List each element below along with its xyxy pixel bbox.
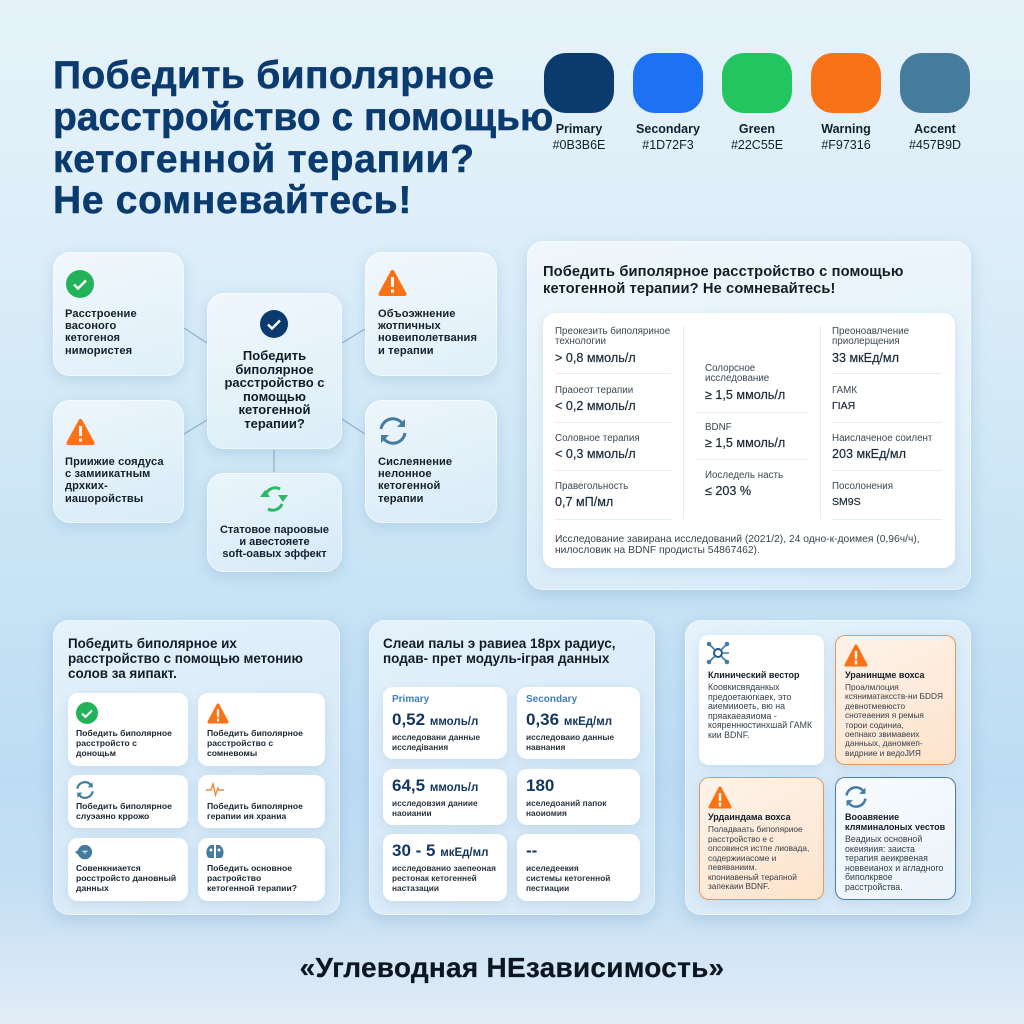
body — [708, 683, 812, 741]
stat: ≥ 1,5 ммоль/л — [705, 436, 785, 450]
body: океияиия: заиста — [845, 844, 915, 854]
stat — [705, 470, 783, 498]
value: 64,5 ммоль/л — [392, 776, 478, 795]
description: исследовани данные — [392, 732, 480, 742]
icon: sync — [845, 786, 867, 808]
title: Победить биполярное — [53, 54, 494, 97]
stat — [555, 481, 628, 509]
stat — [555, 385, 636, 413]
body: расстройства. — [845, 882, 903, 892]
body: певяваниим. — [708, 862, 757, 872]
heading: терапии? — [244, 416, 305, 431]
hub card: centre — [207, 293, 342, 449]
description: исследоваио данные — [526, 732, 614, 742]
palette legend — [544, 53, 970, 152]
heading: помощью — [243, 389, 306, 404]
icon: navy check — [260, 310, 288, 338]
icon: warning — [844, 643, 868, 667]
heading — [383, 636, 615, 666]
swatch label: green: Green — [739, 122, 775, 136]
panel: data modules — [369, 620, 655, 915]
stat: Правегольность — [555, 481, 628, 492]
hub card: bottom right — [365, 400, 497, 523]
swatch label: accent — [909, 122, 961, 152]
data card — [383, 687, 507, 759]
heading — [224, 348, 325, 431]
body: торои содиниа, — [845, 720, 904, 730]
body: видрние и ведоЈИЯ — [845, 748, 921, 758]
text: нелонное — [378, 468, 432, 480]
text: и авестояете — [239, 536, 310, 548]
label: Secondary — [526, 694, 577, 705]
body — [845, 835, 943, 893]
title — [53, 54, 553, 222]
stat: 0,7 мП/мл — [555, 495, 613, 509]
text — [378, 456, 452, 505]
text: дрхких- — [65, 480, 108, 492]
text — [207, 728, 303, 758]
heading: Слеаи палы э равиеа 18рх радиус, — [383, 636, 615, 650]
text: жотпичных — [378, 320, 441, 332]
swatch label: warning: #F97316 — [821, 138, 871, 152]
value: 180 — [526, 776, 554, 795]
text — [76, 864, 176, 893]
icon: green check — [76, 702, 98, 724]
icon: chat bubble — [75, 844, 93, 862]
text: Сислеянение — [378, 456, 452, 468]
hub card: bottom left — [53, 400, 184, 523]
description: исследовзия даниие — [392, 798, 478, 808]
stat: > 0,8 ммоль/л — [555, 351, 636, 365]
title: кляминалоных vестов — [845, 822, 945, 832]
stat — [555, 326, 670, 365]
description: иселедеекия — [526, 863, 579, 873]
body: новвеианох и агладного — [845, 863, 943, 873]
icon: brain — [206, 843, 224, 861]
card: clinical vector — [699, 635, 824, 765]
text: герапии ия храниа — [207, 811, 286, 821]
title: Не сомневайтесь! — [53, 179, 412, 222]
value: 0,36 мкЕд/мл — [526, 710, 612, 729]
heading: биполярное — [235, 362, 314, 377]
data card — [517, 834, 640, 901]
title: Урдаиндама вохса — [708, 812, 791, 822]
body: терапия аеикрвеная — [845, 853, 928, 863]
body: кпониавеный терапной — [708, 872, 797, 882]
text: Объоэжнение — [378, 308, 456, 320]
body: предоетаюгкаек, это — [708, 692, 791, 702]
icon: warning — [66, 418, 95, 445]
stat — [705, 363, 785, 402]
text: растройство — [207, 873, 261, 883]
stat: технологии — [555, 336, 606, 347]
text: с замиикатным — [65, 468, 150, 480]
swatch label: primary — [552, 122, 605, 152]
swatch: green — [722, 53, 792, 113]
text — [65, 456, 164, 505]
text: Статовое пароовые — [220, 524, 329, 536]
icon: warning — [208, 703, 229, 724]
stat — [705, 422, 785, 450]
text — [378, 308, 477, 357]
body: содержииасоме и — [708, 853, 776, 863]
body: аиемииоеть, вю на — [708, 701, 785, 711]
description: иселедоаний папок — [526, 798, 606, 808]
description: навнания — [526, 742, 565, 752]
body — [708, 825, 809, 892]
data card — [517, 687, 640, 759]
data card — [517, 769, 640, 825]
description: наоиании — [392, 808, 432, 818]
swatch label: secondary: #1D72F3 — [642, 138, 694, 152]
description: наоиомия — [526, 808, 567, 818]
stat: Иоследель насть — [705, 470, 783, 481]
text: и терапии — [378, 345, 434, 357]
swatch label: warning: Warning — [821, 122, 871, 136]
value: 30 - 5 мкЕд/мл — [392, 841, 488, 860]
text: слуэаяно кррожо — [76, 811, 149, 821]
icon: network — [706, 641, 730, 665]
heading: Победить биполярное расстройство с помощью — [543, 264, 904, 280]
value: 0,52 ммоль/л — [392, 710, 478, 729]
text: донощьм — [76, 748, 116, 758]
description — [526, 732, 614, 752]
stat: BDNF — [705, 422, 732, 433]
swatch label: primary: #0B3B6E — [553, 138, 605, 152]
text: расстройсто с — [76, 738, 137, 748]
stat: Преоноавлчение — [832, 326, 909, 337]
icon: warning — [708, 785, 732, 809]
stat — [832, 481, 893, 508]
text: Победить биполярное — [76, 801, 172, 811]
stat — [555, 433, 640, 461]
text: Победить биполярное — [76, 728, 172, 738]
footer tagline: «Углеводная НЕзависимость» — [300, 952, 724, 983]
value: -- — [526, 841, 537, 860]
title: кетогенной терапии? — [53, 138, 475, 181]
description: рестонак кетогенней — [392, 873, 477, 883]
label: Primary — [392, 694, 429, 705]
swatch label: secondary: Secondary — [636, 122, 700, 136]
stat: ГАМК — [832, 385, 857, 396]
heading: Победить биполярное их — [68, 636, 237, 650]
icon: sync — [380, 417, 406, 445]
swatch label: green: #22C55E — [731, 138, 783, 152]
card: warning bottom — [699, 777, 824, 900]
description — [526, 798, 606, 818]
icon: green check — [66, 270, 94, 298]
data card — [383, 769, 507, 825]
body: Проалмлоция — [845, 682, 899, 692]
footnote: Исследование завирана исследований (2021/2), 24 одно-к-доимея (0,96ч/ч), — [555, 534, 920, 545]
icon: pulse — [206, 782, 224, 798]
hub card: bottom — [207, 473, 342, 572]
text: Приижие соядуса — [65, 456, 164, 468]
description — [392, 863, 496, 893]
swatch label: green — [731, 122, 783, 152]
text — [65, 308, 137, 357]
swatch: primary — [544, 53, 614, 113]
text: расстройство с — [207, 738, 273, 748]
footnote — [555, 534, 920, 556]
text: Совенкниается — [76, 863, 141, 873]
description: системы кетогенной — [526, 873, 610, 883]
text — [76, 728, 172, 758]
text: Расстроение — [65, 308, 137, 320]
swatch: secondary — [633, 53, 703, 113]
description: исследівания — [392, 742, 448, 752]
title: Вооавяение — [845, 812, 899, 822]
description — [526, 863, 610, 893]
text: иашоройствы — [65, 493, 143, 505]
body: кояреннюстинхшай ГАМК — [708, 720, 812, 730]
card — [198, 693, 325, 766]
body: оепнако звимавеих — [845, 729, 919, 739]
card — [68, 838, 188, 901]
white table card — [543, 313, 955, 568]
stat: Праоеот терапии — [555, 385, 633, 396]
description — [392, 798, 478, 818]
card — [68, 693, 188, 766]
swatch label: accent: Accent — [914, 122, 956, 136]
title: расстройство с помощью — [53, 96, 553, 139]
body — [845, 683, 943, 758]
stat: 33 мкЕд/мл — [832, 351, 899, 365]
text: Победить основное — [207, 863, 292, 873]
text: кетогеноя — [65, 332, 120, 344]
stat: 203 мкЕд/мл — [832, 447, 906, 461]
stat: < 0,2 ммоль/л — [555, 399, 636, 413]
card: accent note — [835, 777, 956, 900]
body: данньых, даномкеп- — [845, 738, 923, 748]
card: warning top — [835, 635, 956, 765]
stat — [832, 326, 909, 365]
text: росстройсто дановный — [76, 873, 176, 883]
stat: ГІАЯ — [832, 400, 855, 412]
stat: Наиcлаченое соилент — [832, 433, 932, 444]
footnote: нилословик на BDNF продисты 54867462). — [555, 545, 760, 556]
heading: расстройство с — [224, 375, 325, 390]
body: ксяниматаксств-ни БDDЯ — [845, 691, 943, 701]
heading: Победить — [243, 348, 306, 363]
description: исследованио заепеоная — [392, 863, 496, 873]
body: биполкрвое — [845, 872, 893, 882]
body: расстройство е с — [708, 834, 773, 844]
text: терапии — [378, 493, 424, 505]
body: снотеаения я ремыя — [845, 710, 924, 720]
hub card: top left — [53, 252, 184, 376]
text — [207, 864, 297, 893]
text — [207, 802, 303, 822]
body: опсовинся истпе лиовада, — [708, 843, 809, 853]
heading — [543, 264, 904, 296]
stat: Солорсное — [705, 363, 755, 374]
card — [198, 775, 325, 828]
title: Клинический вестор — [708, 670, 800, 680]
text: кетогенной терапии? — [207, 883, 297, 893]
data card — [383, 834, 507, 901]
body: девнотмевюсто — [845, 701, 905, 711]
stat: ≥ 1,5 ммоль/л — [705, 388, 785, 402]
body: Коовкисвяданкых — [708, 682, 780, 692]
card — [198, 838, 325, 901]
text: кетогенной — [378, 480, 440, 492]
swatch label: primary: Primary — [556, 122, 602, 136]
title — [845, 812, 945, 832]
description: настазации — [392, 883, 439, 893]
stat: Посолонения — [832, 481, 893, 492]
swatch label: accent: #457B9D — [909, 138, 961, 152]
text: васоного — [65, 320, 116, 332]
text: нимористея — [65, 345, 132, 357]
body: пряакаеаяиома - — [708, 711, 777, 721]
panel: clinical notes — [685, 620, 971, 915]
body: Поладваать бипоnяриое — [708, 824, 803, 834]
icon: green cycle — [260, 486, 288, 512]
card — [68, 775, 188, 828]
stat: SM9S — [832, 496, 861, 508]
text: soft-оавых эффект — [222, 548, 327, 560]
panel: feature grid — [53, 620, 340, 915]
body: кии BDNF. — [708, 730, 750, 740]
text — [76, 801, 172, 821]
stat: Преокезить биполяриное — [555, 326, 670, 337]
text: данных — [76, 883, 109, 893]
text: Победить биполярное — [207, 728, 303, 738]
body: запекаии BDNF. — [708, 881, 770, 891]
panel: metrics table — [527, 241, 971, 590]
stat: < 0,3 ммоль/л — [555, 447, 636, 461]
text: новеиполетвания — [378, 332, 477, 344]
icon: warning — [378, 270, 407, 296]
title: Уранинщме вохса — [845, 670, 925, 680]
stat: приолерщения — [832, 336, 900, 347]
text: сомневомы — [207, 748, 257, 758]
stat — [832, 385, 857, 412]
text: Победить биполярное — [207, 801, 303, 811]
stat: исследование — [705, 373, 769, 384]
text — [220, 524, 329, 560]
stat — [832, 433, 932, 461]
heading: расстройство с помощью метонию — [68, 650, 303, 666]
icon: sync — [76, 781, 94, 799]
heading: кетогенной терапии? Не сомневайтесь! — [543, 280, 836, 296]
hub card: top right — [365, 252, 497, 376]
body: Веадиых основной — [845, 834, 922, 844]
heading: подав- прет модуль-іграя данных — [383, 650, 609, 666]
description — [392, 732, 480, 752]
heading — [68, 636, 303, 680]
stat: ≤ 203 % — [705, 484, 751, 498]
swatch: warning — [811, 53, 881, 113]
heading: солов за яипакт. — [68, 666, 177, 680]
stat: Соловное терапия — [555, 433, 640, 444]
swatch: accent — [900, 53, 970, 113]
heading: кетогенной — [238, 402, 310, 417]
swatch label: secondary — [636, 122, 700, 152]
swatch label: warning — [821, 122, 871, 152]
description: пестиации — [526, 883, 569, 893]
